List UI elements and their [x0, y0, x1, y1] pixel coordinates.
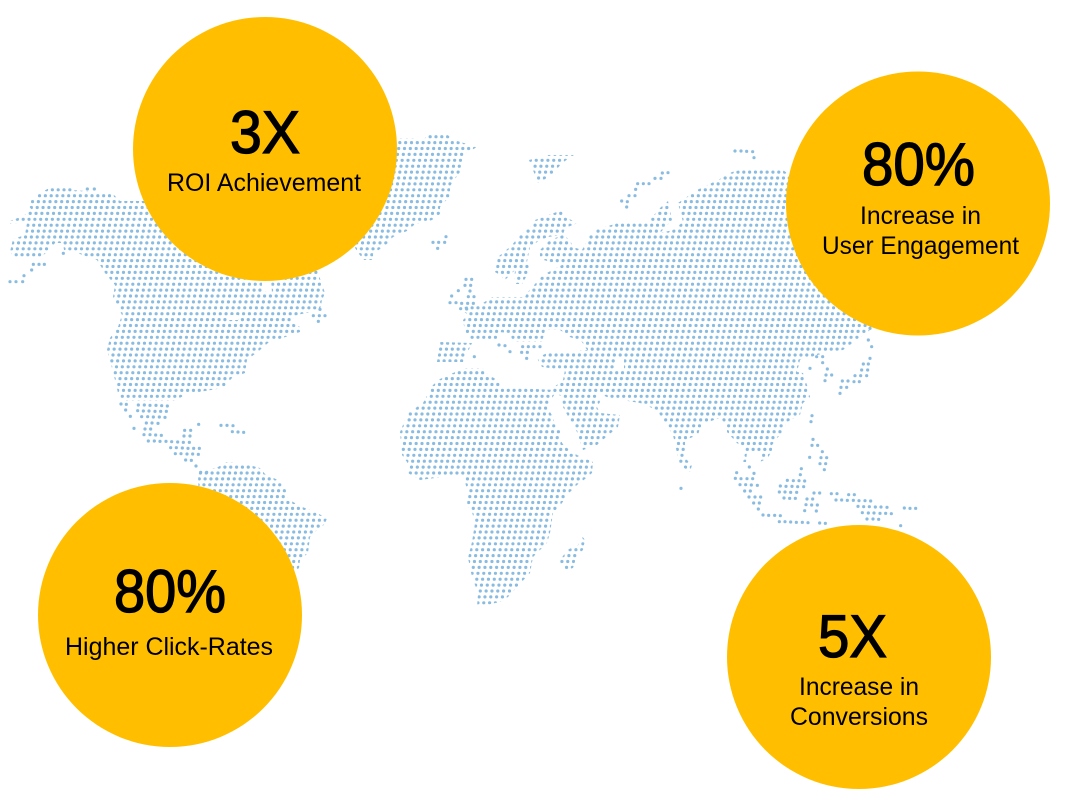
callout: 80% Higher Click-Rates: [38, 483, 302, 747]
map: Madagascar: [559, 536, 585, 570]
map: Europe and Arctic islands, dots group E: [450, 151, 872, 358]
map: Iceland dots group D: [433, 237, 446, 248]
label: Increase in Conversions: Conversions: [790, 703, 928, 731]
map: Eurasia: [460, 168, 900, 472]
label: Increase in User Engagement: Increase in: [860, 202, 981, 230]
map: South America: [198, 462, 327, 580]
callout: 3X ROI Achievement: [133, 17, 397, 281]
map: Scandinavia: [495, 210, 578, 284]
map: Africa: [400, 368, 593, 607]
map: Iberia: [437, 342, 472, 362]
label: Increase in User Engagement: User Engagement: [822, 232, 1019, 260]
map: Greenland: [350, 133, 477, 260]
label: Higher Click-Rates: Higher Click-Rates: [65, 633, 273, 661]
map: dot grid clipped to the continents: [7, 131, 932, 609]
map: Aleutian dots group C: [10, 189, 94, 282]
map: Central America, dots group B: [121, 309, 325, 472]
callout: 5X Increase in Conversions: [727, 525, 991, 789]
map: North America: [10, 186, 325, 401]
label: ROI Achievement: ROI Achievement: [167, 169, 361, 197]
map: inland seas: [229, 279, 624, 369]
map: Asia-Pacific islands, dots group A: [681, 363, 916, 526]
dotted world map: [7, 131, 932, 609]
stat: 5X: 5X: [818, 603, 887, 670]
stat: 3X: 3X: [230, 99, 300, 166]
label: Increase in Conversions: [790, 673, 928, 731]
label: Increase in Conversions: Increase in: [799, 673, 919, 701]
label: Increase in User Engagement: [822, 202, 1019, 260]
stat: 80%: 80%: [114, 558, 226, 625]
stat: 80%: 80%: [862, 131, 975, 198]
callout: 80% Increase in User Engagement: [786, 72, 1050, 336]
map: Svalbard: [529, 155, 574, 183]
